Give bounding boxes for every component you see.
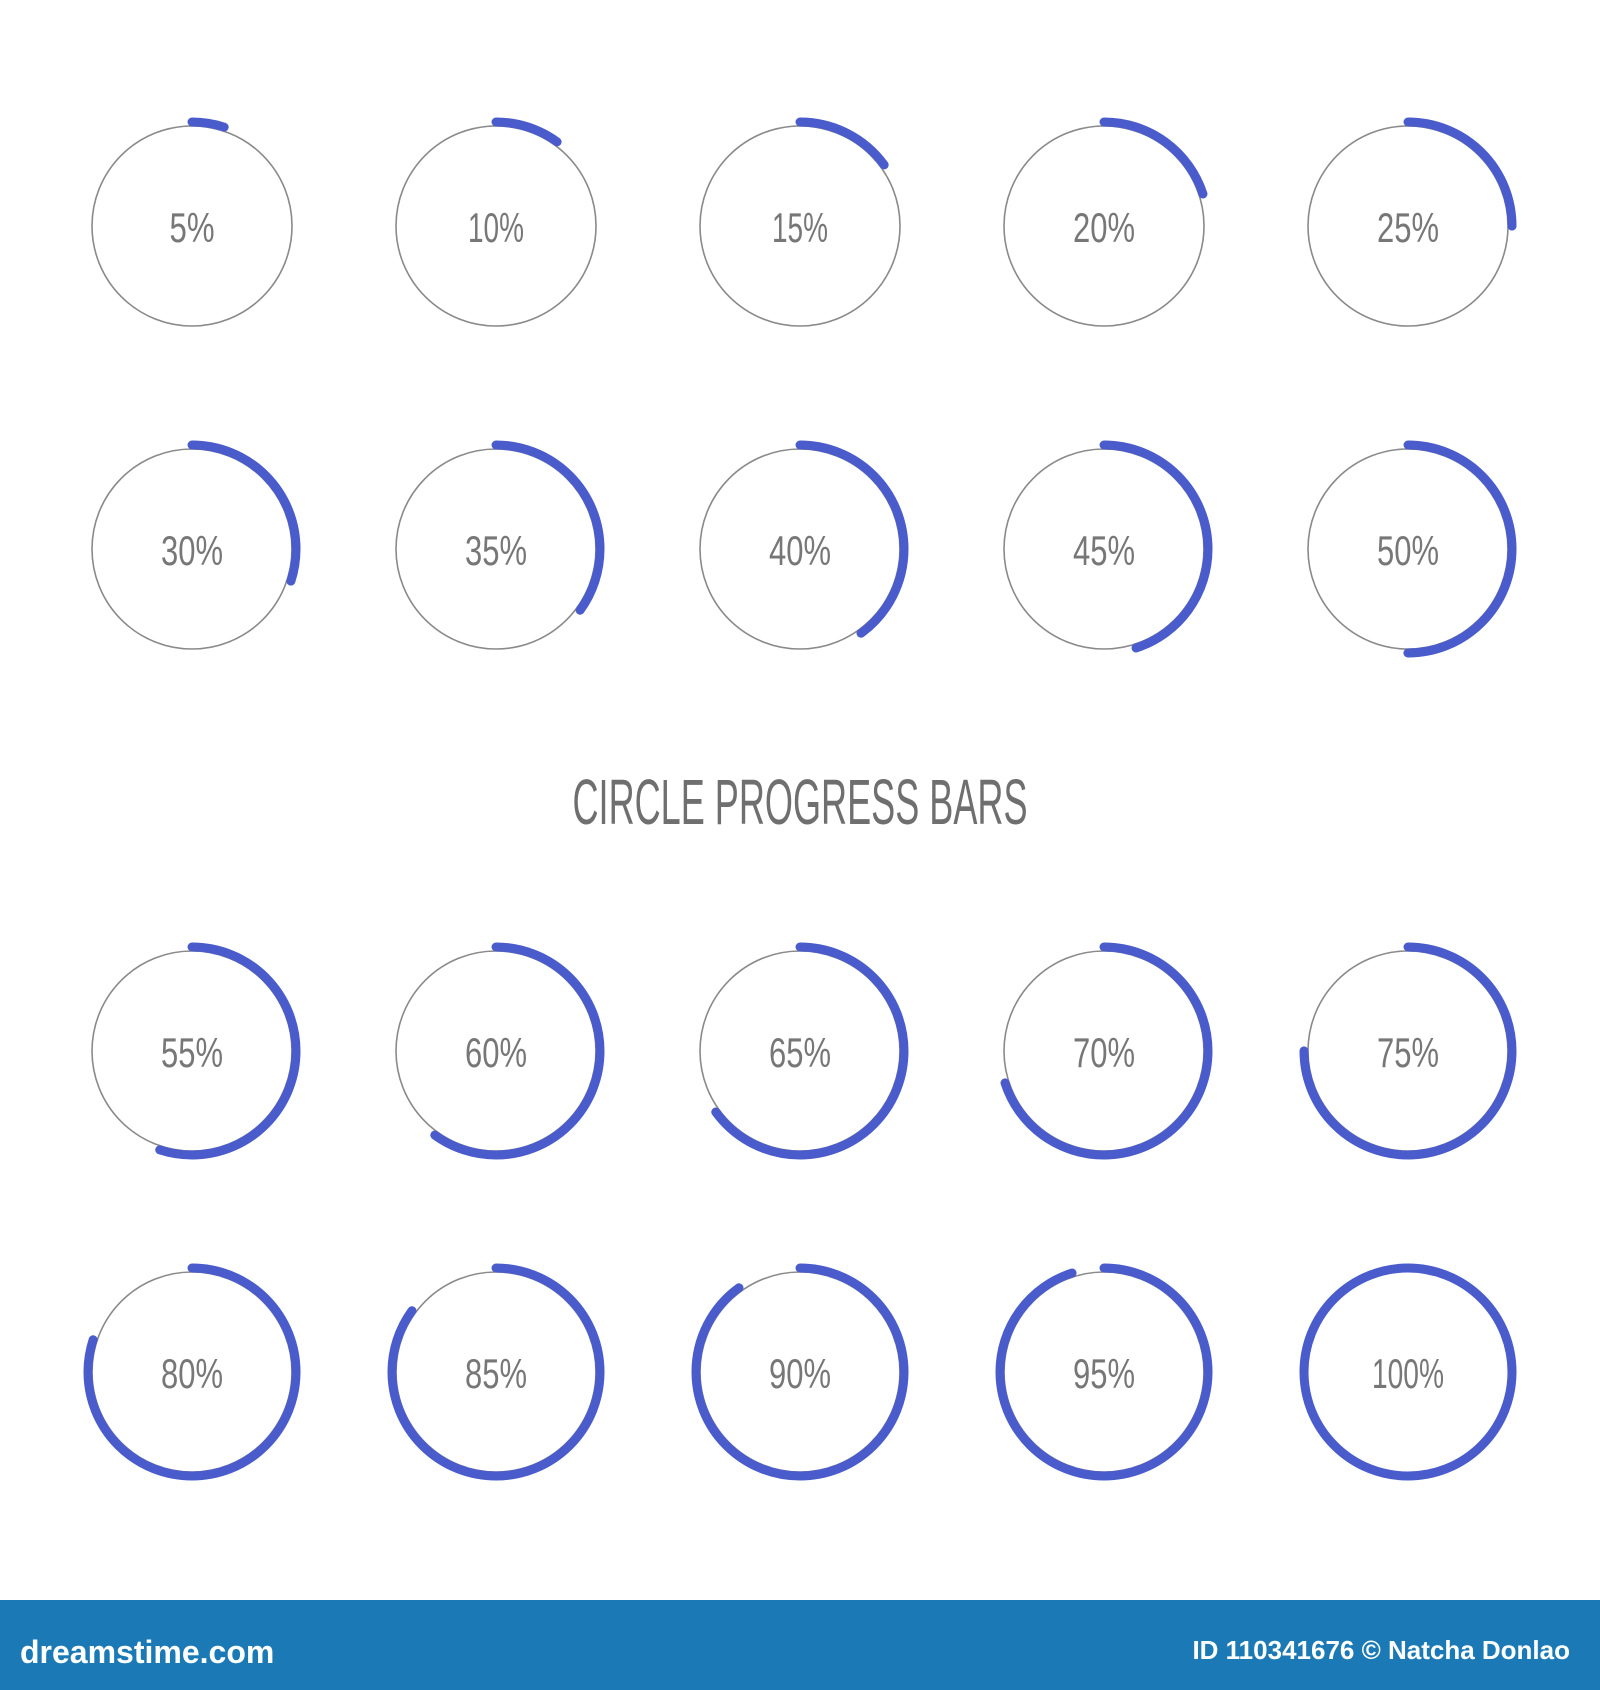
gauge 10%: 10% bbox=[468, 204, 524, 251]
gauge 75%: 75% bbox=[1377, 1029, 1439, 1076]
footer brand: dreamstime.com bbox=[20, 1634, 274, 1670]
gauge 35%: 35% bbox=[465, 527, 527, 574]
gauge 75% bbox=[1304, 947, 1512, 1155]
gauge 5% bbox=[88, 122, 296, 330]
gauge 40%: 40% bbox=[769, 527, 831, 574]
gauge 60% bbox=[392, 947, 600, 1155]
footer credit: ID 110341676 © Natcha Donlao bbox=[1192, 1635, 1570, 1665]
gauge 45%: 45% bbox=[1073, 527, 1135, 574]
title: CIRCLE PROGRESS BARS bbox=[572, 766, 1028, 838]
gauge 100% bbox=[1304, 1268, 1512, 1476]
gauge 20%: 20% bbox=[1073, 204, 1135, 251]
gauge 55%: 55% bbox=[161, 1029, 223, 1076]
gauge 65%: 65% bbox=[769, 1029, 831, 1076]
gauge 95%: 95% bbox=[1073, 1350, 1135, 1397]
gauge 100%: 100% bbox=[1372, 1350, 1444, 1397]
gauge 85%: 85% bbox=[465, 1350, 527, 1397]
gauge 80% bbox=[88, 1268, 296, 1476]
gauge 45% bbox=[1000, 445, 1208, 653]
gauge 60%: 60% bbox=[465, 1029, 527, 1076]
gauge 90% bbox=[696, 1268, 904, 1476]
gauge 15% bbox=[696, 122, 904, 330]
gauge 95% bbox=[1000, 1268, 1208, 1476]
gauge 70%: 70% bbox=[1073, 1029, 1135, 1076]
gauge 40% bbox=[696, 445, 904, 653]
gauge 35% bbox=[392, 445, 600, 653]
gauge 50% bbox=[1304, 445, 1512, 653]
gauge 85% bbox=[392, 1268, 600, 1476]
gauge 25% bbox=[1304, 122, 1512, 330]
gauge 5%: 5% bbox=[170, 204, 214, 251]
gauge 90%: 90% bbox=[769, 1350, 831, 1397]
gauge 25%: 25% bbox=[1377, 204, 1439, 251]
gauge 20% bbox=[1000, 122, 1208, 330]
gauge 30%: 30% bbox=[161, 527, 223, 574]
footer bar bbox=[0, 1600, 1600, 1690]
gauge 55% bbox=[88, 947, 296, 1155]
gauge 70% bbox=[1000, 947, 1208, 1155]
gauge 80%: 80% bbox=[161, 1350, 223, 1397]
gauge 15%: 15% bbox=[772, 204, 828, 251]
gauge 50%: 50% bbox=[1377, 527, 1439, 574]
gauge 10% bbox=[392, 122, 600, 330]
gauge 65% bbox=[696, 947, 904, 1155]
gauge 30% bbox=[88, 445, 296, 653]
